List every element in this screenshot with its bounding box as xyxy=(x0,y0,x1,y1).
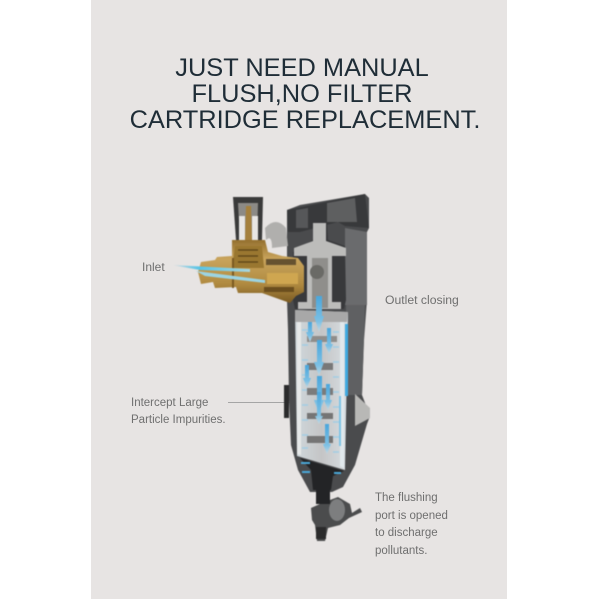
filter cartridge xyxy=(295,310,348,470)
label: flushing port: pollutants. xyxy=(375,544,427,556)
label: intercept large particle impurities xyxy=(131,397,226,426)
label: flushing port: The flushing xyxy=(375,492,438,504)
label: intercept large particle impurities: Intercept Large xyxy=(131,397,208,409)
brass inlet body xyxy=(198,240,304,303)
label: inlet: Inlet xyxy=(142,260,165,274)
label: flushing port: to discharge xyxy=(375,527,438,539)
drain funnel xyxy=(300,458,344,490)
label: flushing port xyxy=(375,492,448,556)
label: flushing port: port is opened xyxy=(375,510,448,522)
leader line xyxy=(228,402,290,403)
label: outlet closing: Outlet closing xyxy=(385,293,459,307)
blue flow arrows xyxy=(303,296,348,454)
flushing valve xyxy=(311,490,362,541)
label: intercept large particle impurities: Particle Impurities. xyxy=(131,414,226,426)
housing outer body xyxy=(284,194,370,492)
panel: background xyxy=(91,0,507,599)
brass valve cap xyxy=(233,197,288,248)
title: CARTRIDGE REPLACEMENT. xyxy=(130,106,480,134)
piston cutaway xyxy=(293,222,346,309)
title xyxy=(130,54,480,134)
title: FLUSH,NO FILTER xyxy=(191,80,412,108)
title: JUST NEED MANUAL xyxy=(175,54,429,82)
inlet water jet xyxy=(172,265,265,283)
